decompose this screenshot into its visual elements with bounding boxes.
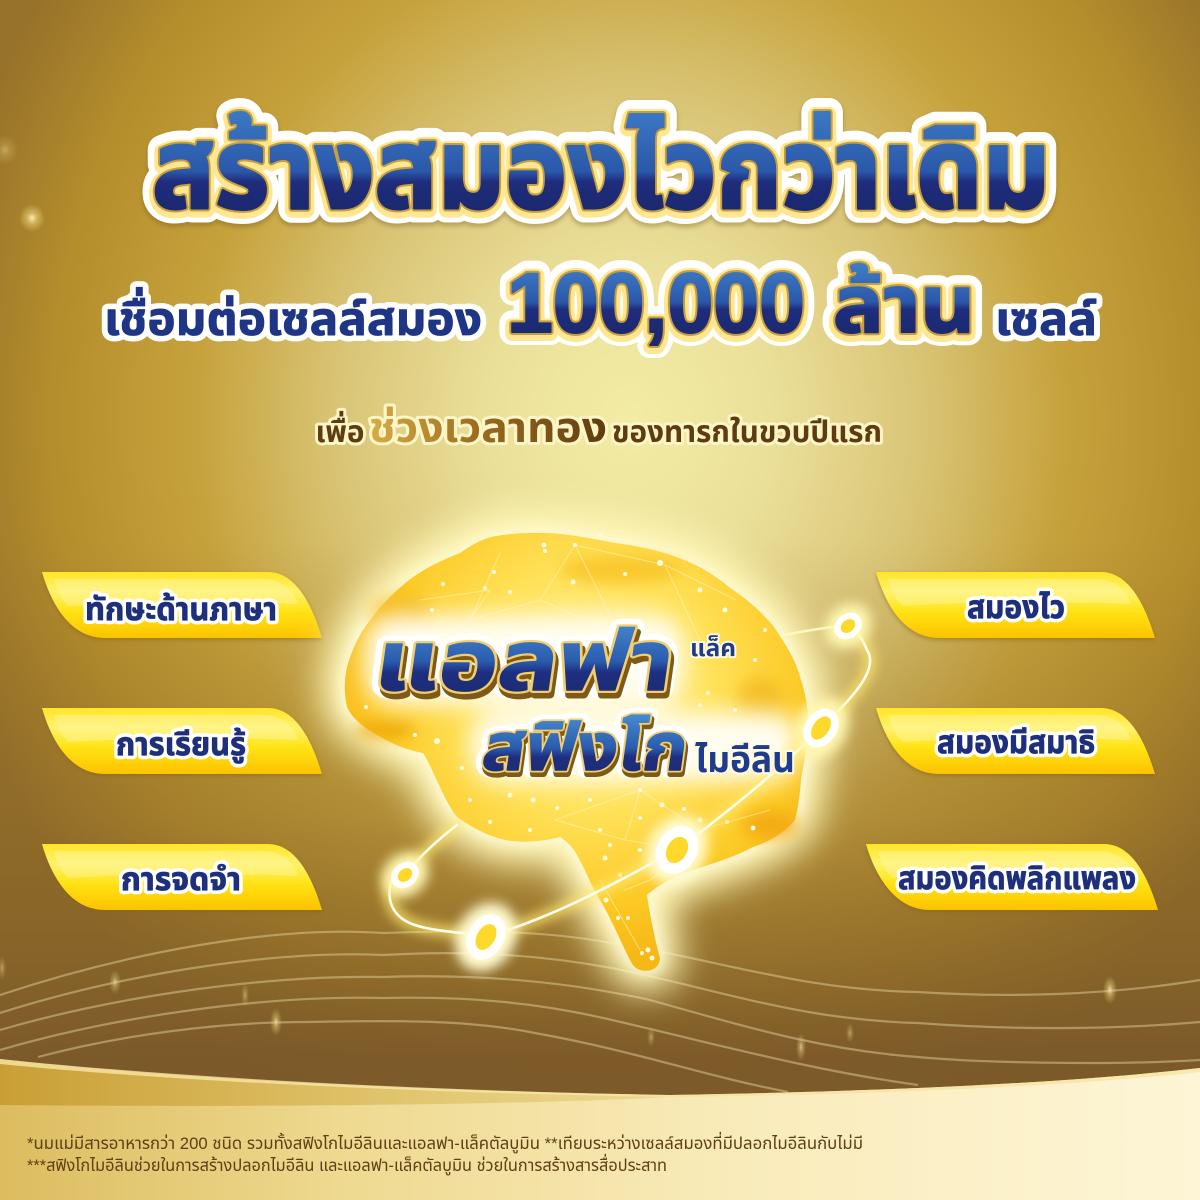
- pill: learning: การเรียนรู้: [116, 726, 246, 763]
- alpha wordmark: แอลฟา: [372, 619, 683, 713]
- pill: memory: การจดจำ: [121, 861, 241, 897]
- pill: focused brain: สมองมีสมาธิ: [937, 724, 1095, 760]
- big number 100,000: 100,000: [507, 256, 805, 350]
- decorative sparkles: [0, 135, 1117, 1061]
- alpha wordmark: แอลฟา: [369, 614, 681, 708]
- orbit rings with nodes: [372, 594, 881, 983]
- alpha wordmark: แอลฟา: [369, 614, 681, 708]
- pill: language skills: ทักษะด้านภาษา: [85, 591, 277, 627]
- left pills: [42, 572, 322, 912]
- pill: memory: การจดจำ: [121, 861, 241, 897]
- pill: language skills: ทักษะด้านภาษา: [85, 591, 277, 627]
- product name: [369, 614, 795, 789]
- big word million: ล้าน: [833, 260, 975, 349]
- title: สร้างสมองไวกว่าเดิม: [152, 107, 1050, 232]
- word cells: เซลล์: [995, 293, 1097, 345]
- subtitle lead text: เชื่อมต่อเซลล์สมอง: [104, 287, 482, 345]
- network dots: [364, 532, 767, 960]
- pill: creative brain: [866, 844, 1158, 912]
- pill: focused brain: สมองมีสมาธิ: [937, 724, 1095, 760]
- orbit behind brain: [777, 625, 848, 636]
- node center: [634, 804, 720, 896]
- node bottom: [443, 891, 529, 983]
- pill: learning: การเรียนรู้: [116, 726, 246, 763]
- footnote line 2: ***สฟิงโกไมอีลินช่วยในการสร้างปลอกไมอีลิน และแอลฟา-แล็คตัลบูมิน ช่วยในการสร้างสารสื่อประสาท: [27, 1153, 667, 1177]
- big word million: ล้าน: [833, 262, 975, 351]
- title: สร้างสมองไวกว่าเดิม: [152, 109, 1050, 234]
- big number 100,000: 100,000: [507, 256, 805, 350]
- sphingo wordmark: สฟิงโก: [478, 711, 693, 785]
- pill: focused brain: [876, 708, 1155, 776]
- title: สร้างสมองไวกว่าเดิม: [152, 107, 1050, 232]
- right pills: [866, 572, 1158, 912]
- alpha wordmark: แอลฟา: [369, 614, 681, 708]
- sphingo wordmark: สฟิงโก: [478, 711, 693, 785]
- myelin small text: ไมอีลิน: [695, 739, 795, 780]
- pill: fast brain: สมองไว: [967, 589, 1065, 625]
- node right: [782, 687, 860, 769]
- brain shading: [355, 556, 798, 839]
- node left: [372, 843, 438, 907]
- pill: learning: [42, 708, 322, 776]
- big number 100,000: 100,000: [507, 256, 805, 350]
- subtitle lead text: เชื่อมต่อเซลล์สมอง: [104, 287, 482, 345]
- golden period tagline: [316, 404, 882, 451]
- golden period tagline: เพื่อ: [316, 410, 364, 449]
- subtitle: connecting brain cells: [104, 256, 1097, 352]
- golden period tagline: ช่วงเวลาทอง: [369, 404, 607, 451]
- footnotes: [27, 1131, 863, 1177]
- text glow behind product name: [365, 615, 800, 782]
- sphingo wordmark: สฟิงโก: [478, 711, 693, 785]
- sphingo wordmark: สฟิงโก: [479, 715, 695, 789]
- orbit line glow: [390, 625, 870, 937]
- bottom footer band: [0, 1059, 1200, 1200]
- wave lines: [0, 931, 1200, 1092]
- big number 100,000: 100,000: [507, 258, 805, 352]
- big word million: ล้าน: [833, 260, 975, 349]
- pill: fast brain: สมองไว: [967, 589, 1065, 625]
- pill: memory: [42, 844, 322, 912]
- pill: language skills: [42, 572, 322, 640]
- big word million: ล้าน: [833, 260, 975, 349]
- word cells: เซลล์: [995, 293, 1097, 345]
- orbit line: [390, 625, 870, 937]
- title: สร้างสมองไวกว่าเดิม: [152, 110, 1050, 235]
- node top right: [815, 594, 881, 658]
- title: สร้างสมองไวกว่าเดิม: [152, 107, 1050, 232]
- lac small text: แล็ค: [690, 635, 736, 662]
- golden period tagline: ของทารกในขวบปีแรก: [612, 416, 882, 449]
- brain illustration: [345, 532, 808, 971]
- pill: creative brain: สมองคิดพลิกแพลง: [898, 860, 1136, 896]
- footnote line 1: *นมแม่มีสารอาหารกว่า 200 ชนิด รวมทั้งสฟิงโกไมอีลินและแอลฟา-แล็คตัลบูมิน **เทียบระหว่างเซลล์สมองที่มีปลอกไมอีลินกับไม่มี: [27, 1131, 863, 1155]
- network lines: [420, 545, 770, 950]
- pill: fast brain: [876, 572, 1155, 640]
- pill: creative brain: สมองคิดพลิกแพลง: [898, 860, 1136, 896]
